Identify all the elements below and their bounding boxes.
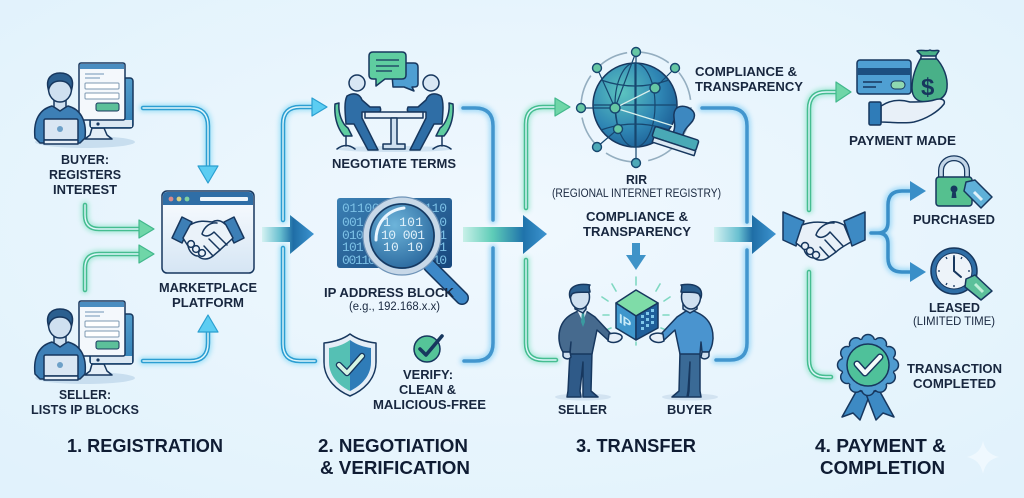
icon: completion ribbon badge xyxy=(838,334,898,420)
label: ip address block xyxy=(324,285,455,313)
label: buyer: BUYER xyxy=(667,402,713,417)
icon: magnifier over ip address block: 00110 01 101 010 xyxy=(342,253,447,268)
label: leased for limited time xyxy=(913,300,995,328)
icon: magnifier over ip address block: 10 001 xyxy=(381,228,425,243)
label: compliance and transparency, middle xyxy=(583,209,691,239)
arrow: seller interest to marketplace xyxy=(85,245,154,290)
label: marketplace platform: PLATFORM xyxy=(172,295,244,310)
bracket: left branches of stage 2 xyxy=(283,98,327,361)
label: ip address block: (e.g., 192.168.x.x) xyxy=(349,301,440,313)
icon: credit card, money bag and hand xyxy=(857,50,947,125)
bracket: green branches of stage 4 xyxy=(809,82,851,377)
figure: seller in suit xyxy=(555,284,622,400)
arrow: stage 1 to stage 2 xyxy=(262,215,314,254)
bracket: left branches of stage 3 xyxy=(526,98,570,360)
heading: 2. negotiation and verification: & VERIFICATION xyxy=(320,458,470,478)
arrow: stage 2 to stage 3 xyxy=(463,215,547,254)
bracket: right branches of stage 2 xyxy=(463,108,493,361)
heading: 4. payment and completion: COMPLETION xyxy=(820,458,945,478)
icon: clock with tag xyxy=(931,248,992,300)
label: seller lists ip blocks xyxy=(31,387,139,417)
label: buyer registers interest: BUYER: xyxy=(61,152,109,167)
label: verify clean and malicious-free xyxy=(373,367,486,412)
heading: 3. transfer: 3. TRANSFER xyxy=(576,436,696,456)
icon: corner sparkle xyxy=(967,441,999,474)
label: compliance and transparency, middle: COMPLIANCE & xyxy=(586,209,688,224)
label: buyer registers interest: INTEREST xyxy=(53,182,117,197)
icon: buyer at computer xyxy=(35,63,135,148)
icon: rir globe and stamp xyxy=(576,48,708,168)
label: transaction completed xyxy=(907,361,1002,391)
panel: negotiation and verification xyxy=(283,52,493,478)
label: transaction completed: COMPLETED xyxy=(913,376,996,391)
label: purchased: PURCHASED xyxy=(913,212,995,227)
label: rir regional internet registry: (REGIONAL INTERNET REGISTRY) xyxy=(552,188,721,200)
label: leased for limited time: (LIMITED TIME) xyxy=(913,316,995,328)
icon: credit card, money bag and hand: $ xyxy=(921,74,935,101)
arrow: buyer to marketplace xyxy=(143,108,218,183)
icon: seller at computer xyxy=(35,301,135,384)
label: seller lists ip blocks: LISTS IP BLOCKS xyxy=(31,402,139,417)
label: marketplace platform xyxy=(159,280,257,310)
icon: marketplace window with handshake xyxy=(162,191,254,273)
icon: magnifier over ip address block: 001 011 101 110 xyxy=(342,215,447,230)
arrow: seller to marketplace xyxy=(143,315,218,361)
label: compliance and transparency, middle: TRANSPARENCY xyxy=(583,224,691,239)
icon: magnifier over ip address block: 1 101 xyxy=(383,215,423,230)
label: compliance and transparency, top xyxy=(695,64,803,94)
label: seller lists ip blocks: SELLER: xyxy=(59,387,111,402)
icon: padlock with tag xyxy=(936,158,992,208)
label: ip address block: IP ADDRESS BLOCK xyxy=(324,285,455,300)
icon: verification shield xyxy=(324,334,376,396)
label: payment made: PAYMENT MADE xyxy=(849,133,956,148)
label: verify clean and malicious-free: VERIFY: xyxy=(403,367,453,382)
heading: 4. payment and completion xyxy=(815,436,946,478)
icon: magnifier over ip address block: 01100 101 0110 xyxy=(342,201,447,216)
icon: glowing ip cube xyxy=(602,277,670,345)
label: compliance and transparency, top: COMPLIANCE & xyxy=(695,64,797,79)
arrow: stage 3 to stage 4 xyxy=(714,215,776,254)
heading: 4. payment and completion: 4. PAYMENT & xyxy=(815,436,946,456)
label: rir regional internet registry xyxy=(552,172,721,200)
icon: magnifier over ip address block: 010 110 001 001 xyxy=(342,228,447,243)
label: compliance and transparency, top: TRANSPARENCY xyxy=(695,79,803,94)
bracket: right branches of stage 3 xyxy=(702,108,747,360)
panel: payment and completion xyxy=(783,50,1002,478)
panel: registration xyxy=(31,63,257,456)
arrow: buyer interest to marketplace xyxy=(85,205,154,238)
heading: 1. registration: 1. REGISTRATION xyxy=(67,436,223,456)
heading: 2. negotiation and verification: 2. NEGOTIATION xyxy=(318,436,468,456)
label: seller: SELLER xyxy=(558,402,608,417)
icon: green check circle xyxy=(414,336,442,362)
label: buyer registers interest xyxy=(49,152,121,197)
arrow: fork to purchased and leased xyxy=(871,181,926,282)
label: rir regional internet registry: RIR xyxy=(626,172,648,187)
label: negotiate terms: NEGOTIATE TERMS xyxy=(332,156,456,171)
label: verify clean and malicious-free: CLEAN & xyxy=(399,382,456,397)
icon: magnifier over ip address block: 10 10 xyxy=(383,240,423,255)
arrow: compliance down to ip cube xyxy=(626,243,646,270)
heading: 2. negotiation and verification xyxy=(318,436,470,478)
label: leased for limited time: LEASED xyxy=(929,300,980,315)
label: verify clean and malicious-free: MALICIOUS-FREE xyxy=(373,397,486,412)
icon: magnifier over ip address block: 101 110 101 001 xyxy=(342,240,447,255)
icon: closing handshake xyxy=(783,212,865,260)
label: transaction completed: TRANSACTION xyxy=(907,361,1002,376)
label: buyer registers interest: REGISTERS xyxy=(49,167,121,182)
label: marketplace platform: MARKETPLACE xyxy=(159,280,257,295)
icon: magnifier over ip address block xyxy=(337,197,462,298)
panel: transfer xyxy=(526,48,803,456)
icon: glowing ip cube: IP xyxy=(619,311,632,334)
figure: buyer in sweater xyxy=(650,284,718,400)
icon: two people negotiating at table xyxy=(335,52,453,152)
